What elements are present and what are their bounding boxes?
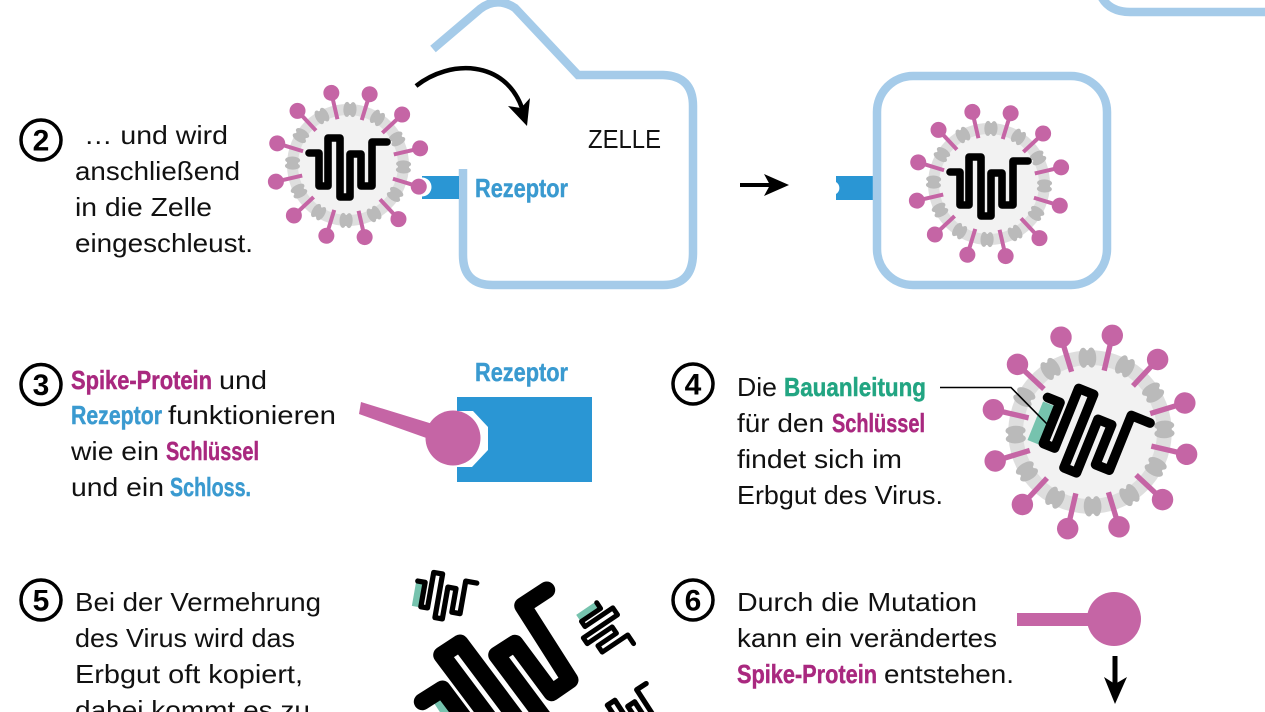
step 3 number badge [21, 364, 61, 404]
step 3 text: wie ein [70, 436, 159, 466]
step 5 text: Erbgut oft kopiert, [75, 659, 303, 689]
step 4 text: Die [737, 372, 777, 402]
step 6 text: kann ein verändertes [737, 623, 997, 653]
spike protein icon [1017, 592, 1141, 646]
step 3 text: Schloss. [170, 472, 251, 502]
step 4 text: findet sich im [737, 444, 902, 474]
step 5 text [75, 587, 321, 712]
step 6 text: entstehen. [884, 659, 1014, 689]
virus inside cell [907, 102, 1071, 266]
step 2 text [75, 120, 253, 258]
step 3 text: funktionieren [168, 400, 336, 430]
step 6 number badge [673, 580, 713, 620]
receptor on cell [422, 176, 459, 199]
step 3 text: und [219, 365, 267, 395]
step 4 text: Erbgut des Virus. [737, 480, 943, 510]
lock and key diagram [359, 397, 592, 482]
large genome copy [422, 590, 570, 712]
step 5 number badge [21, 580, 61, 620]
step 6 text: Spike-Protein [737, 659, 877, 689]
large virus with highlighted genome [940, 315, 1207, 549]
corner of cell top right [1100, 0, 1265, 12]
step 2 text: in die Zelle [75, 192, 212, 222]
step 4 text: für den [737, 408, 824, 438]
step 5 text: Bei der Vermehrung [75, 587, 321, 617]
step 2 text: eingeschleust. [75, 228, 253, 258]
small genome copy right [570, 596, 636, 665]
step 4 number badge: 4 [685, 368, 702, 402]
step 4 text: Schlüssel [832, 408, 925, 438]
step 3 text: Rezeptor [71, 400, 162, 430]
step 6 text: Durch die Mutation [737, 587, 977, 617]
step 2 text: anschließend [75, 156, 240, 186]
step 5 number badge: 5 [33, 584, 49, 618]
arrow: down to changed spike [1104, 656, 1127, 704]
small genome copy top left [411, 570, 477, 624]
step 5 text: des Virus wird das [75, 623, 295, 653]
step 3 text: Spike-Protein [71, 365, 212, 395]
step 3 text: und ein [71, 472, 164, 502]
small genome copy bottom right [595, 681, 669, 712]
step 3 text: Schlüssel [166, 436, 259, 466]
step 4 number badge [673, 364, 713, 404]
step 3 number badge: 3 [33, 369, 49, 402]
step 2 number badge: 2 [33, 124, 49, 158]
arrow: curved into cell [416, 68, 530, 126]
arrow: to next state [740, 174, 789, 196]
step 6 text [737, 587, 1014, 689]
receptor label: Rezeptor [475, 173, 568, 203]
cell label: ZELLE [588, 124, 661, 154]
cell with opening [433, 2, 693, 285]
step 3 text [70, 365, 336, 502]
closed cell [877, 76, 1107, 285]
step 2 number badge [21, 120, 61, 160]
receptor label large: Rezeptor [475, 357, 568, 387]
step 4 text: Bauanleitung [784, 372, 926, 402]
step 4 text [737, 372, 943, 510]
virus docking at receptor [266, 83, 432, 247]
step 6 number badge: 6 [685, 584, 701, 618]
step 2 text: … und wird [84, 120, 228, 150]
receptor in closed cell [836, 176, 873, 200]
